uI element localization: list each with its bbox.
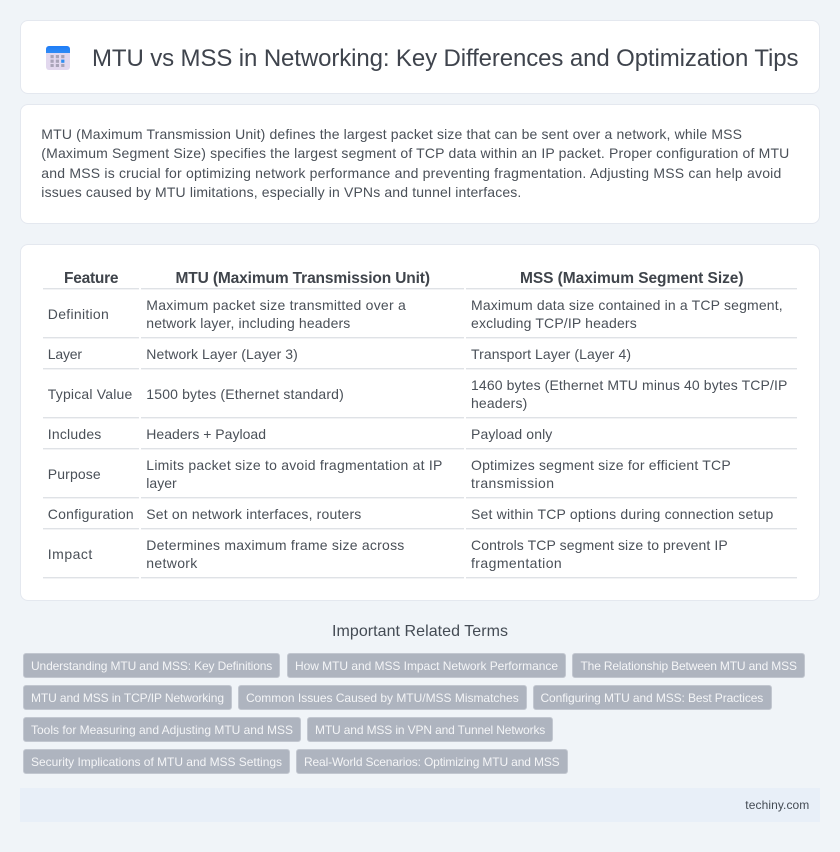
row: Layer: Network Layer (Layer 3)	[146, 346, 298, 362]
row: Configuration: Set on network interfaces, routers	[146, 506, 361, 522]
tag	[296, 750, 568, 774]
tag: Common Issues Caused by MTU/MSS Mismatches	[246, 691, 519, 705]
row: Purpose: Limits packet size to avoid fragmentation at IP	[146, 457, 442, 473]
icon: calendar grid	[46, 46, 70, 70]
row: Configuration	[48, 506, 774, 522]
row: Impact: Impact	[48, 546, 92, 562]
tag: Real-World Scenarios: Optimizing MTU and MSS	[304, 755, 560, 769]
comparison table	[43, 270, 797, 578]
footer bar	[20, 788, 820, 822]
row: Impact: Determines maximum frame size across	[146, 537, 404, 553]
related terms heading: Important Related Terms	[332, 623, 508, 640]
tag	[572, 654, 804, 678]
row: Layer	[48, 346, 631, 362]
row: Includes: Includes	[48, 426, 101, 442]
title: MTU vs MSS in Networking: Key Differences and Optimization Tips	[92, 45, 798, 72]
row: Layer: Transport Layer (Layer 4)	[471, 346, 631, 362]
intro text: (Maximum Segment Size) specifies the largest segment of TCP data within an IP packet. Proper configuration of MTU	[41, 145, 789, 161]
row: Purpose: Optimizes segment size for efficient TCP	[471, 457, 731, 473]
tag	[288, 654, 566, 678]
row: Purpose: Purpose	[48, 466, 101, 482]
table header: MTU (Maximum Transmission Unit)	[176, 270, 430, 287]
row: Purpose: layer	[146, 475, 177, 491]
table header: MSS (Maximum Segment Size)	[520, 270, 744, 287]
row: Definition: excluding TCP/IP headers	[471, 315, 637, 331]
intro panel	[20, 104, 820, 224]
row: Typical Value	[48, 377, 787, 411]
row: Impact	[48, 537, 728, 571]
tag: MTU and MSS in TCP/IP Networking	[31, 691, 224, 705]
tag: Understanding MTU and MSS: Key Definitions	[31, 659, 272, 673]
row: Definition: Maximum packet size transmitted over a	[146, 297, 406, 313]
tag	[24, 750, 290, 774]
row: Purpose	[48, 457, 731, 491]
row: Definition: Definition	[48, 306, 109, 322]
row: Definition: Maximum data size contained in a TCP segment,	[471, 297, 783, 313]
tag	[24, 654, 280, 678]
footer credit: techiny.com	[745, 798, 809, 812]
tag: How MTU and MSS Impact Network Performance	[295, 659, 558, 673]
tag: MTU and MSS in VPN and Tunnel Networks	[315, 723, 545, 737]
tag: The Relationship Between MTU and MSS	[580, 659, 797, 673]
related terms tags	[24, 654, 804, 774]
header panel	[20, 20, 820, 94]
row: Impact: fragmentation	[471, 555, 562, 571]
intro text	[41, 126, 789, 200]
tag: Tools for Measuring and Adjusting MTU and MSS	[31, 723, 293, 737]
row: Typical Value: 1500 bytes (Ethernet standard)	[146, 386, 344, 402]
row: Typical Value: Typical Value	[48, 386, 133, 402]
row: Definition: network layer, including headers	[146, 315, 350, 331]
row: Impact: network	[146, 555, 198, 571]
row: Includes: Headers + Payload	[146, 426, 266, 442]
row: Configuration: Configuration	[48, 506, 134, 522]
tag	[238, 686, 526, 710]
row: Layer: Layer	[48, 346, 82, 362]
intro text: MTU (Maximum Transmission Unit) defines the largest packet size that can be sent over a network, while MSS	[41, 126, 742, 142]
row: Purpose: transmission	[471, 475, 554, 491]
row: Typical Value: headers)	[471, 395, 527, 411]
row: Impact: Controls TCP segment size to prevent IP	[471, 537, 728, 553]
intro text: issues caused by MTU limitations, especially in VPNs and tunnel interfaces.	[41, 184, 521, 200]
tag: Configuring MTU and MSS: Best Practices	[540, 691, 763, 705]
row: Definition	[48, 297, 783, 331]
table header	[64, 270, 744, 287]
tag	[24, 718, 300, 742]
tag	[308, 718, 552, 742]
row: Includes	[48, 426, 552, 442]
row: Configuration: Set within TCP options during connection setup	[471, 506, 774, 522]
row: Includes: Payload only	[471, 426, 552, 442]
table header: Feature	[64, 270, 119, 287]
comparison table panel	[20, 244, 820, 600]
tag	[24, 686, 232, 710]
row: Typical Value: 1460 bytes (Ethernet MTU minus 40 bytes TCP/IP	[471, 377, 787, 393]
tag: Security Implications of MTU and MSS Settings	[31, 755, 282, 769]
intro text: and MSS is crucial for optimizing network performance and preventing fragmentation. Adjusting MSS can help avoid	[41, 165, 781, 181]
tag	[534, 686, 772, 710]
